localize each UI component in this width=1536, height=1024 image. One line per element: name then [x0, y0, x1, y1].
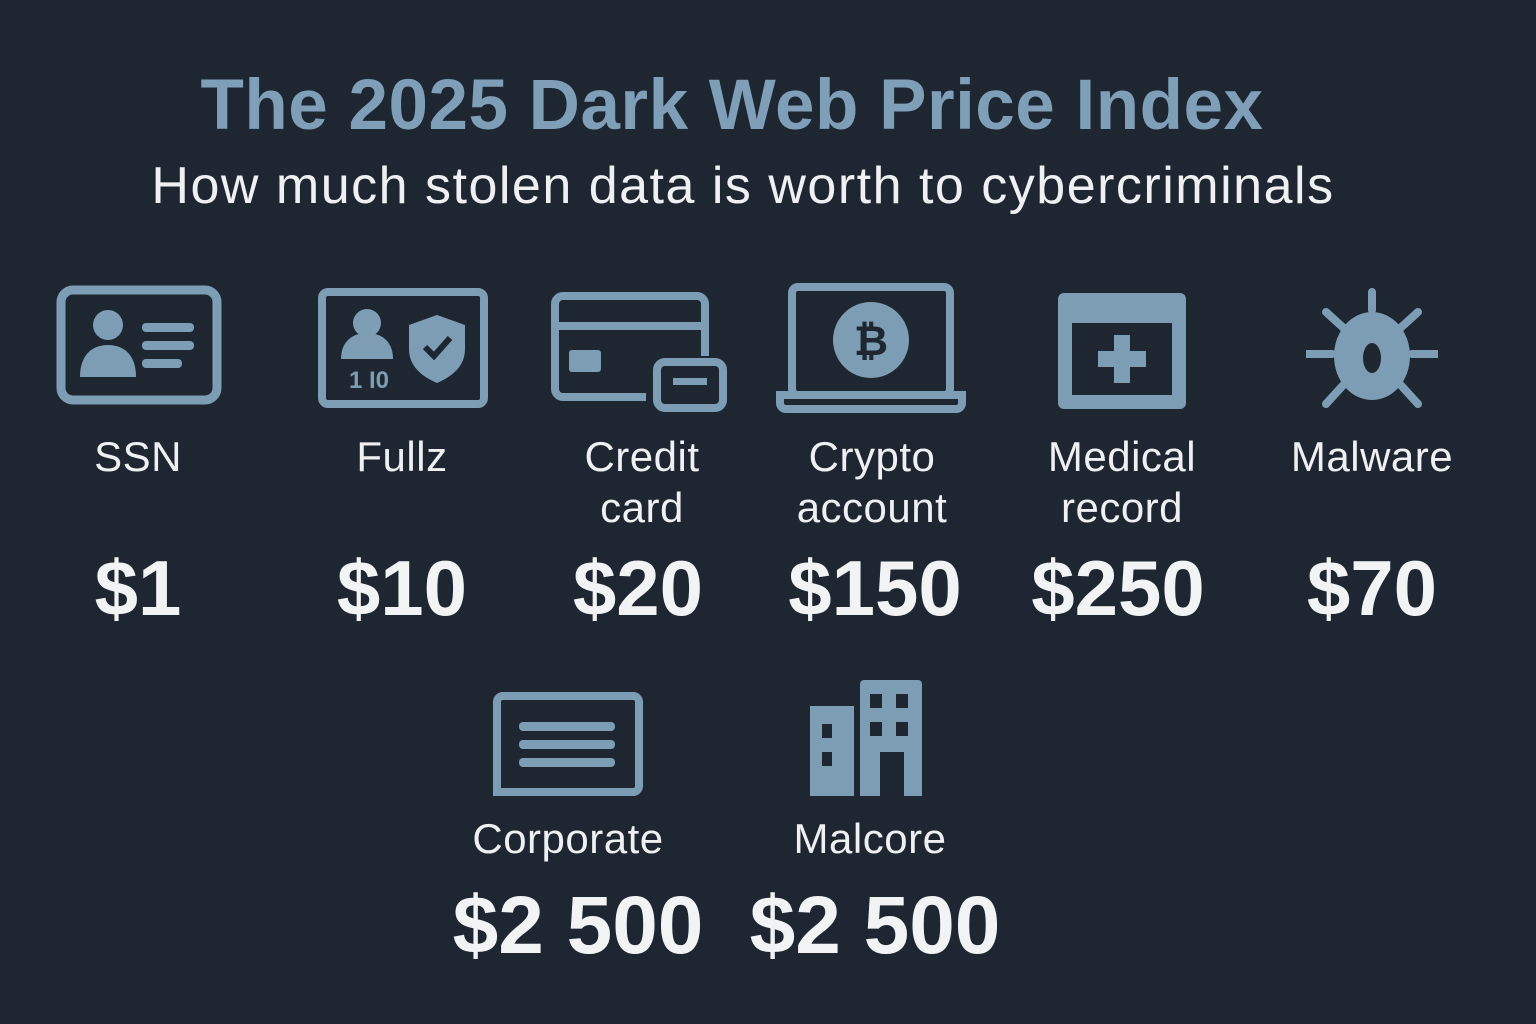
icon: crypto laptop — [776, 283, 966, 413]
label: Credit card: card — [600, 484, 684, 531]
icon: medical record — [1058, 293, 1186, 409]
icon: Fullz: 1 I0 — [349, 367, 389, 394]
icon: credit card — [551, 292, 727, 412]
label: Medical record — [1048, 433, 1196, 531]
price: Corporate: $2 500 — [453, 880, 703, 971]
label: Corporate: Corporate — [472, 815, 664, 862]
label: SSN: SSN — [94, 433, 182, 480]
icon: Malcore building — [810, 680, 922, 796]
label: Credit card — [584, 433, 700, 531]
price: Crypto: $150 — [788, 544, 962, 632]
label: Crypto account — [797, 433, 947, 531]
label: Malcore: Malcore — [794, 815, 946, 862]
price: SSN: $1 — [95, 544, 181, 632]
label: Malware: Malware — [1291, 433, 1453, 480]
icon: Fullz — [318, 288, 488, 408]
icon: corporate document — [493, 692, 643, 796]
price: Fullz: $10 — [337, 544, 467, 632]
price: Medical: $250 — [1031, 544, 1205, 632]
subtitle: How much stolen data is worth to cybercriminals — [151, 157, 1335, 215]
label: Medical record: record — [1061, 484, 1183, 531]
title: The 2025 Dark Web Price Index — [201, 66, 1263, 145]
price: Malware: $70 — [1307, 544, 1437, 632]
icon: crypto laptop: ₿ — [854, 317, 888, 364]
label: Fullz: Fullz — [356, 433, 448, 480]
price: Malcore: $2 500 — [750, 880, 1000, 971]
icon: SSN id card — [56, 286, 222, 404]
price: Credit card: $20 — [573, 544, 703, 632]
label: Credit card: Credit — [584, 433, 700, 480]
label: Crypto account: account — [797, 484, 947, 531]
label: Crypto account: Crypto — [809, 433, 935, 480]
icon: malware bug — [1306, 288, 1438, 408]
label: Medical record: Medical — [1048, 433, 1196, 480]
